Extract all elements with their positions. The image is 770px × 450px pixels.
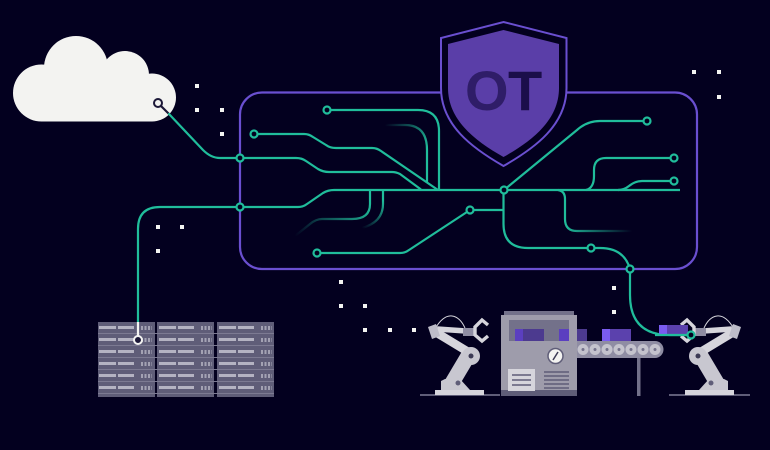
node: gripper port — [688, 332, 694, 338]
text: OT: O — [465, 59, 509, 122]
box held by gripper — [659, 325, 688, 335]
robot arm: left — [420, 316, 500, 395]
network traces — [138, 110, 691, 335]
icon: cloud — [13, 36, 176, 122]
icon: shield: T — [508, 59, 542, 122]
connector: cloud to frame — [158, 103, 240, 158]
connector: conveyor end — [655, 334, 691, 336]
node: cloud port — [154, 99, 162, 107]
robot arm: right — [669, 316, 750, 395]
decorative dot squares — [156, 70, 721, 332]
connector: server port — [134, 322, 142, 344]
conveyor belt — [577, 329, 664, 396]
gauge — [548, 348, 563, 364]
connection nodes — [236, 106, 678, 272]
icon: shield — [441, 22, 566, 166]
machine — [501, 311, 577, 396]
server racks — [98, 322, 274, 397]
panel: network frame — [240, 92, 697, 269]
